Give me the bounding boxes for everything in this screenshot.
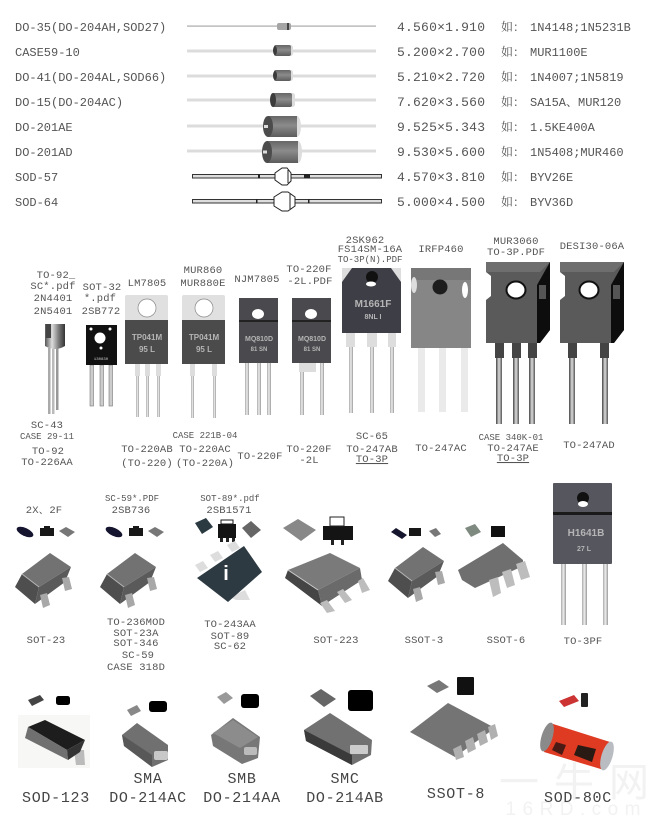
- package: SSOT-6: SSOT-6: [487, 635, 525, 647]
- package: SOT-89: SC-62: [214, 641, 246, 653]
- package: TO-3P: FS14SM-16A: [338, 244, 403, 256]
- package: SC-59: 2SB736: [112, 505, 150, 517]
- row: CASE59-10: MUR1100E: [530, 46, 588, 60]
- package: TO-220F: 81 SN: [251, 347, 267, 353]
- row: DO-201AD: 1N5408;MUR460: [530, 146, 624, 160]
- package: SOD-80C: [537, 693, 617, 807]
- package: TO-247AE: MUR3060: [493, 236, 539, 248]
- row: DO-15: 7.620×3.560: [397, 95, 485, 110]
- package: TO-247AC: TO-247AC: [415, 443, 467, 455]
- package: SOT-23: [15, 505, 75, 647]
- row: DO-201AE: [15, 116, 596, 137]
- package: TO-220F: MQ810D: [245, 336, 273, 343]
- package: SMC: [304, 689, 384, 807]
- package: SOD-123: [18, 695, 90, 807]
- package: TO-92: TO-226AA: [21, 457, 73, 469]
- package: SMA: [109, 701, 187, 807]
- package: TO-220AB: TO-220AB: [121, 444, 173, 456]
- package: SOT-223: SOT-223: [313, 635, 359, 647]
- package: SMB: [203, 692, 281, 807]
- row: DO-201AE: 9.525×5.343: [397, 120, 485, 135]
- package: TO-247AC: IRFP460: [418, 244, 464, 256]
- package: TO-247AE: TO-3P: [497, 453, 529, 465]
- package: TO-247AE: TO-3P.PDF: [487, 247, 545, 259]
- package: SSOT-3: [388, 528, 445, 647]
- package: SOT-89: SOT-89*.pdf: [200, 494, 260, 504]
- package: SOD-123: SOD-123: [22, 790, 90, 807]
- package: SMB: DO-214AA: [203, 790, 281, 807]
- package: TO-220AC: CASE 221B-04: [173, 431, 237, 441]
- package: TO-3P: TO-3P(N).PDF: [338, 255, 402, 265]
- package: TO-3P: M1661F: [355, 299, 391, 310]
- package: SSOT-8: [410, 677, 498, 803]
- package: TO-220F-2L: -2L: [299, 455, 319, 467]
- package: TO-247AE: CASE 340K-01: [479, 433, 543, 443]
- row: SOD-64: BYV36D: [530, 196, 573, 210]
- package: TO-92: SC-43: [31, 420, 63, 432]
- package: TO-220AC: [173, 265, 237, 470]
- package: TO-92: SC*.pdf: [30, 281, 76, 293]
- package: TO-3PF: 27 L: [577, 546, 592, 553]
- row: DO-41: 如：: [501, 68, 525, 85]
- row: SOD-57: 4.570×3.810: [397, 170, 485, 185]
- row: DO-201AD: DO-201AD: [15, 146, 73, 160]
- panel: surface-mount diode packages: [18, 677, 617, 807]
- row: DO-41: [15, 68, 624, 85]
- package: TO-92: 2N4401: [34, 293, 72, 305]
- row: SOD-57: BYV26E: [530, 171, 573, 185]
- package: SC-59: SOT-23A: [113, 628, 159, 640]
- row: DO-201AD: 9.530×5.600: [397, 145, 485, 160]
- row: DO-201AE: 如：: [501, 118, 525, 135]
- package: TO-220AB: TP041M: [132, 333, 162, 342]
- row: DO-41: 1N4007;1N5819: [530, 71, 624, 85]
- row: CASE59-10: CASE59-10: [15, 46, 80, 60]
- package: TO-220AC: TO-220AC: [179, 444, 231, 456]
- row: CASE59-10: 如：: [501, 43, 525, 60]
- package: TO-247AD: TO-247AD: [563, 440, 615, 452]
- package: SOT-23: 2X、2F: [26, 505, 62, 517]
- package: SC-59: SC-59*.PDF: [105, 494, 159, 504]
- package: TO-3P: 8NL I: [364, 314, 382, 321]
- row: SOD-64: [15, 192, 573, 211]
- package: SMA: SMA: [133, 771, 163, 788]
- panel: axial diode packages: [15, 18, 631, 211]
- package: TO-220AB: [121, 278, 173, 470]
- package: TO-3P: [338, 235, 403, 466]
- package: SOT-32: SOT-32: [83, 282, 121, 294]
- panel: through-hole transistor packages: [20, 235, 625, 470]
- package: TO-247AE: [479, 236, 550, 465]
- package: SOT-32: 130830: [94, 358, 109, 362]
- row: DO-35: 1N4148;1N5231B: [530, 21, 631, 35]
- package: TO-92: CASE 29-11: [20, 432, 74, 442]
- package: TO-247AC: [411, 244, 471, 455]
- package: TO-220AB: 95 L: [139, 345, 155, 354]
- package: SOD-80C: SOD-80C: [544, 790, 612, 807]
- panel: small outline SOT packages: [15, 483, 612, 674]
- row: SOD-57: SOD-57: [15, 171, 58, 185]
- package: SC-59: SC-59: [122, 650, 154, 662]
- row: DO-15: [15, 93, 621, 110]
- package: TO-220AB: LM7805: [128, 278, 166, 290]
- watermark: 16RD.com: [506, 799, 640, 820]
- package: TO-3P: SC-65: [356, 431, 388, 443]
- package: TO-220F: NJM7805: [234, 274, 280, 286]
- row: DO-201AD: [15, 141, 624, 163]
- row: DO-41: DO-41(DO-204AL,SOD66): [15, 71, 166, 85]
- package: TO-220F-2L: MQ810D: [298, 336, 326, 343]
- package: TO-92: [20, 270, 76, 469]
- row: DO-201AE: 1.5KE400A: [530, 121, 596, 135]
- row: DO-35: 4.560×1.910: [397, 20, 485, 35]
- package: TO-3P: TO-3P: [356, 454, 388, 466]
- package: SMB: SMB: [227, 771, 257, 788]
- package: SOT-32: [82, 282, 121, 406]
- package: TO-247AE: TO-247AE: [487, 443, 539, 455]
- package: TO-92: 2N5401: [34, 306, 72, 318]
- package: SMC: DO-214AB: [306, 790, 384, 807]
- package: TO-92: TO-92: [32, 446, 64, 458]
- row: SOD-64: 5.000×4.500: [397, 195, 485, 210]
- package: TO-220F-2L: [286, 264, 333, 467]
- package: SOT-89: [195, 494, 262, 653]
- package: TO-3PF: TO-3PF: [564, 636, 602, 648]
- package: TO-92: TO-92_: [37, 270, 76, 282]
- package: SMC: SMC: [330, 771, 360, 788]
- row: SOD-57: [15, 168, 573, 185]
- package: TO-220F: TO-220F: [237, 451, 283, 463]
- package: TO-3P: TO-247AB: [346, 444, 398, 456]
- package: SC-59: TO-236MOD: [107, 617, 165, 629]
- package: TO-220AC: (TO-220A): [176, 458, 234, 470]
- package: TO-220AC: MUR860: [184, 265, 222, 277]
- package: TO-220F-2L: -2L.PDF: [287, 276, 333, 288]
- package: SOT-89: i: [223, 563, 229, 585]
- package: SOT-89: TO-243AA: [204, 619, 256, 631]
- row: DO-201AE: DO-201AE: [15, 121, 73, 135]
- package: TO-247AD: [560, 241, 625, 452]
- package: SOT-89: SOT-89: [211, 631, 249, 643]
- row: DO-15: SA15A、MUR120: [530, 96, 621, 110]
- row: DO-41: 5.210×2.720: [397, 70, 485, 85]
- row: CASE59-10: 5.200×2.700: [397, 45, 485, 60]
- row: DO-35: 如：: [501, 18, 525, 35]
- package: SC-59: SOT-346: [113, 638, 159, 650]
- row: CASE59-10: [15, 43, 588, 60]
- row: DO-35: DO-35(DO-204AH,SOD27): [15, 21, 166, 35]
- package: TO-3PF: [553, 483, 612, 648]
- package: TO-220AC: 95 L: [196, 345, 212, 354]
- package: TO-220F-2L: 81 SN: [304, 347, 320, 353]
- row: DO-201AD: 如：: [501, 143, 525, 160]
- package: TO-3P: 2SK962: [346, 235, 384, 247]
- package: SOT-223: [283, 517, 370, 647]
- package: TO-220F-2L: TO-220F: [286, 264, 332, 276]
- row: DO-35: [15, 18, 631, 35]
- package: SOT-89: 2SB1571: [206, 505, 252, 517]
- watermark: 一牛网: [499, 761, 649, 805]
- package: TO-247AD: DESI30-06A: [560, 241, 625, 253]
- package: SOT-32: 2SB772: [82, 306, 120, 318]
- row: SOD-64: SOD-64: [15, 196, 58, 210]
- package: TO-3PF: H1641B: [568, 528, 604, 539]
- row: DO-15: DO-15(DO-204AC): [15, 96, 123, 110]
- package: TO-220F-2L: TO-220F: [286, 444, 332, 456]
- package: SOT-32: *.pdf: [84, 293, 116, 305]
- package: SSOT-6: [458, 524, 530, 647]
- package: SC-59: [100, 494, 165, 674]
- package: TO-220AC: TP041M: [189, 333, 219, 342]
- package: TO-220AC: MUR880E: [180, 278, 226, 290]
- package: SMA: DO-214AC: [109, 790, 187, 807]
- row: SOD-57: 如：: [501, 168, 525, 185]
- package: TO-220F: [234, 274, 283, 463]
- package: SSOT-3: SSOT-3: [405, 635, 443, 647]
- package: SC-59: CASE 318D: [107, 662, 165, 674]
- package: TO-220AB: (TO-220): [121, 458, 173, 470]
- row: DO-15: 如：: [501, 93, 525, 110]
- row: SOD-64: 如：: [501, 193, 525, 210]
- package: SOT-23: SOT-23: [27, 635, 65, 647]
- package: SSOT-8: SSOT-8: [427, 786, 485, 803]
